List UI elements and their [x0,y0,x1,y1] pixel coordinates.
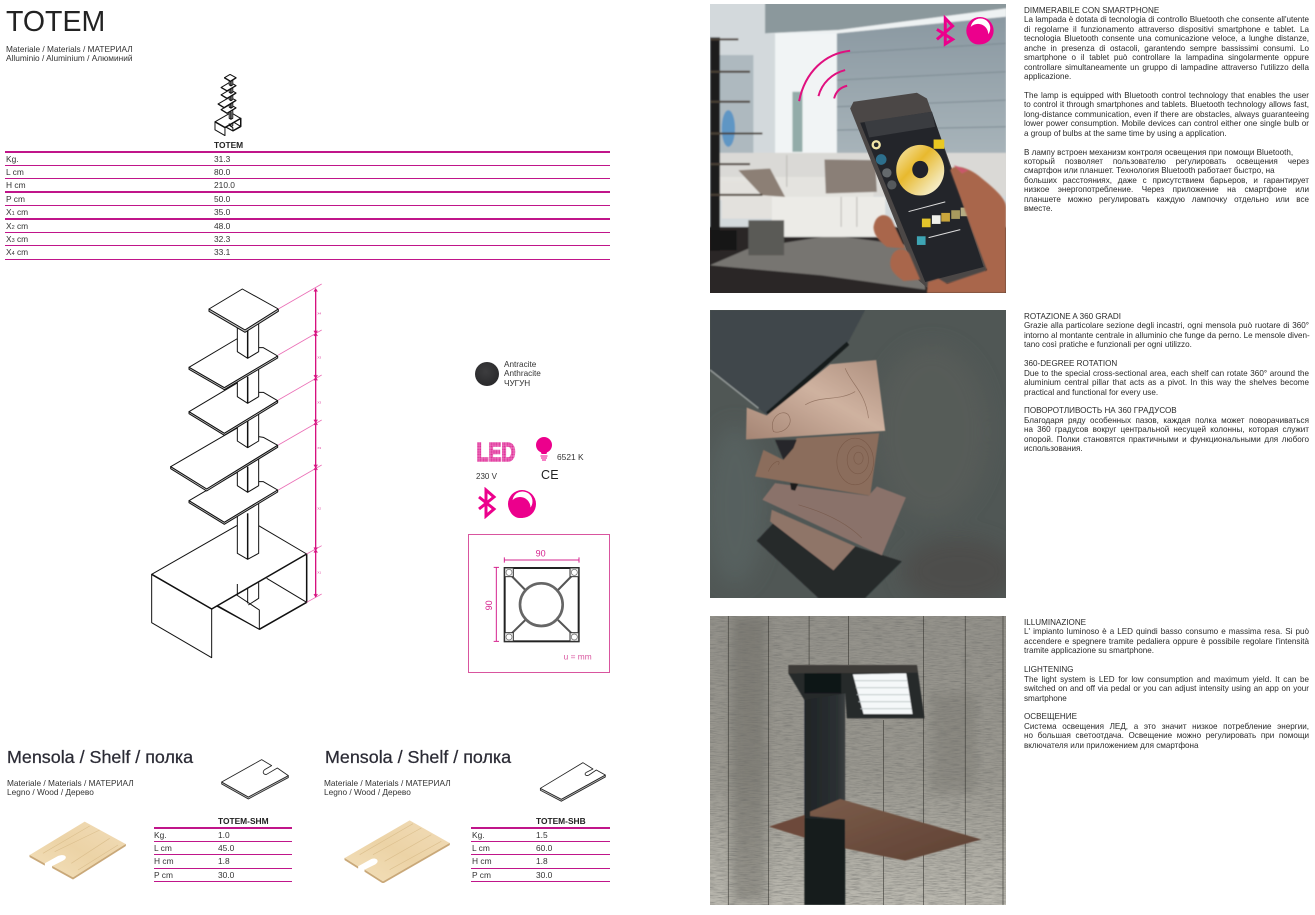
signal arcs [799,51,850,101]
text: dimmable with smartphone: lower power consumption. Mobile devices can control either one single bulb or [1024,119,1309,128]
specification table: 32.3 [214,234,230,244]
table: TOTEM-SHB: P cm [472,870,491,880]
voltage: 230 V [476,472,497,481]
text: 360-degree rotation: Due to the special cross-sectional area, each shelf can rotate 360° around the [1024,369,1309,378]
phone [850,93,987,288]
material text: shelf M: Materiale / Materials / МАТЕРИАЛ [7,778,134,788]
specification table: 35.0 [214,207,230,217]
specification table: L cm [6,167,24,177]
colour swatch: anthracite [475,362,499,386]
photo: smartphone control in living room [710,4,1006,293]
text: lighting: smartphone [1024,694,1067,702]
material text: shelf M: Legno / Wood / Дерево [7,787,94,797]
table: TOTEM-SHM [154,816,292,882]
technical drawing: totem tower with dimensions: X1 [317,571,321,575]
text: dimmable with smartphone: The lamp is equipped with Bluetooth control technology that enables the user [1024,91,1309,100]
table: TOTEM-SHM: 30.0 [218,870,234,880]
specification table: 80.0 [214,167,230,177]
text: lighting: tramite applicazione su smartphone. [1024,646,1154,655]
text: dimmable with smartphone: a group of bulbs at the same time by using a application. [1024,129,1226,138]
image: wood shelf M [29,822,126,880]
text: lighting: The light system is LED for low consumption and maximum yield. It can be [1024,675,1309,684]
text: dimmable with smartphone [1024,6,1309,213]
table: TOTEM-SHB: TOTEM-SHB [536,816,586,826]
material text: shelf M [7,778,134,797]
material text [6,44,133,63]
text: lighting: Система освещения ЛЕД, а это значит низкое потребление энергии, [1024,722,1309,731]
icon: CE mark: CE [541,468,559,482]
bluetooth overlay [937,18,953,44]
technical drawing: totem tower with dimensions: X4 [317,312,321,316]
text: lighting: LIGHTENING [1024,665,1073,674]
text: lighting [1024,618,1309,750]
material text: Alluminio / Aluminium / Алюминий [6,53,132,63]
photo: rotating shelves from above [710,310,1006,598]
specification table: Kg. [6,154,19,164]
specification table: 31.3 [214,154,230,164]
photo: lamp head over concrete wall [710,616,1006,905]
text: 360-degree rotation: ПОВОРОТЛИВОСТЬ НА 360 ГРАДУСОВ [1024,406,1177,415]
heading: shelf M: Mensola / Shelf / полка [7,747,193,767]
technical drawing: totem tower with dimensions [151,284,322,658]
specification table: H cm [6,180,26,190]
specification table [5,140,610,260]
section diagram: 90 x 90 mm profile: 90 [484,600,494,610]
icon: dimmer [508,490,536,518]
text: 360-degree rotation: использования. [1024,444,1083,453]
text: 360-degree rotation: опорой. Полки становятся практичными и функциональными для любого [1024,435,1309,444]
specification table: X4 cm [6,247,28,257]
text: 360-degree rotation: practical and functional for every use. [1024,388,1158,396]
text: dimmable with smartphone: который позволяет пользователю регулировать освещения через [1024,157,1309,166]
section diagram: 90 x 90 mm profile: u = mm [564,652,592,662]
text: dimmable with smartphone: DIMMERABILE CON SMARTPHONE [1024,6,1159,15]
text: dimmable with smartphone: controllare simultaneamente un gruppo di lampadine attraverso l'utilizzo della [1024,63,1309,72]
specification table: P cm [6,194,25,204]
material text: shelf B [324,778,451,797]
table: TOTEM-SHM: 1.8 [218,856,230,866]
dimmer overlay [966,17,994,44]
colour label: Anthracite [504,369,541,378]
table: TOTEM-SHB: L cm [472,843,490,853]
table: TOTEM-SHM: P cm [154,870,173,880]
technical drawing: totem tower with dimensions: X3 [317,446,321,450]
heading: shelf B: Mensola / Shelf / полка [325,747,511,767]
text: dimmable with smartphone: В лампу встроен механизм контроля освещения при помощи Bluetooth, [1024,148,1293,157]
table: TOTEM-SHB: Kg. [472,830,485,840]
text: 360-degree rotation: intorno al montante centrale in alluminio che funge da perno. Le mensole diven- [1024,331,1310,340]
technical drawing: totem tower with dimensions: X3 [317,356,321,360]
text: dimmable with smartphone: вместе. [1024,204,1053,213]
hand [874,165,1006,293]
text: lighting: ILLUMINAZIONE [1024,618,1086,627]
text: dimmable with smartphone: La lampada è dotata di tecnologia di controllo Bluetooth che consente all'utente [1024,15,1309,24]
text: dimmable with smartphone: to control it through smartphones and tablets. Bluetooth technology allows fast, [1024,100,1309,109]
text: 360-degree rotation [1024,312,1310,453]
icon: bluetooth [478,487,496,519]
table: TOTEM-SHB [471,816,610,882]
text: 360-degree rotation: 360-DEGREE ROTATION [1024,359,1117,368]
text: dimmable with smartphone: di regolarne il funzionamento attraverso dispositivi smartphone e tablet. La [1024,25,1309,34]
technical drawing: totem tower with dimensions: X3 [317,401,321,405]
table: TOTEM-SHB: 60.0 [536,843,552,853]
colour label: ЧУГУН [504,379,530,388]
material text: shelf B: Legno / Wood / Дерево [324,787,411,797]
text: 360-degree rotation: Grazie alla particolare sezione degli incastri, ogni mensola può ruotare di 360° [1024,321,1309,330]
table: TOTEM-SHB: 1.5 [536,830,548,840]
table: TOTEM-SHM: H cm [154,856,174,866]
specification table: 33.1 [214,247,230,257]
text: 360-degree rotation: Благодаря ряду особенных пазов, каждая полка может поворачиваться [1024,416,1309,425]
text: dimmable with smartphone: long-distance communication, even if there are obstacles, always guaranteeing [1024,110,1309,119]
section diagram: 90 x 90 mm profile [468,534,610,673]
text: dimmable with smartphone: планшете можно регулировать каждую лампочку отдельно или все [1024,195,1309,204]
material text: shelf B: Materiale / Materials / МАТЕРИАЛ [324,778,451,788]
specification table: X1 cm [6,207,28,217]
text: dimmable with smartphone: tecnologia Bluetooth consente una comunicazione veloce, a lunghe distanze, [1024,34,1309,43]
text: 360-degree rotation: на 360 градусов вокруг центральной несущей колонны, которая служит [1024,425,1309,434]
table: TOTEM-SHM: L cm [154,843,172,853]
technical drawing: totem tower with dimensions: X2 [317,507,321,511]
text: lighting: ОСВЕЩЕНИЕ [1024,712,1077,721]
text: lighting: но большая светоотдача. Освещение можно регулировать при помощи [1024,731,1309,740]
text: dimmable with smartphone: smartphone o il tablet può controllare la lampadina singolarmente oppure [1024,53,1309,62]
text: lighting: включателя или приложением для смартфона [1024,741,1199,750]
specification table: 50.0 [214,194,230,204]
text: lighting: switched on and off via pedal or you can adjust intensity using an app on your [1024,684,1309,693]
icon: shelf M outline [221,759,289,800]
material text: Materiale / Materials / МАТЕРИАЛ [6,44,133,54]
icon: bulb [536,437,552,460]
text: lighting: L' impianto luminoso è a LED quindi basso consumo e massima resa. Si può [1024,627,1309,636]
dimension lines [278,284,322,602]
icon: small totem [214,74,242,136]
text: dimmable with smartphone: anche in presenza di ostacoli, garantendo sempre bassissimi consumi. Lo [1024,44,1309,53]
colour label [504,360,541,388]
table: TOTEM-SHB: 1.8 [536,856,548,866]
text: dimmable with smartphone: низкое энергопотребление. Через приложение на смартфоне или [1024,185,1309,194]
table: TOTEM-SHM: 45.0 [218,843,234,853]
text: lighting: accendere e spegnere tramite pedaliera oppure è possibile regolare l'intensità [1024,637,1309,646]
colour label: Antracite [504,360,536,369]
table: TOTEM-SHM: TOTEM-SHM [218,816,269,826]
image: wood shelf B [344,820,450,883]
specification table: TOTEM [214,140,243,150]
table: TOTEM-SHB: 30.0 [536,870,552,880]
specification table: X2 cm [6,221,28,231]
text: 360-degree rotation: tano così pratiche e funzionali per ogni utilizzo. [1024,340,1192,349]
specification table: 48.0 [214,221,230,231]
icon: shelf B outline [540,762,606,802]
title: TOTEM [6,6,105,38]
table: TOTEM-SHB: H cm [472,856,492,866]
section diagram: 90 x 90 mm profile: 90 [536,549,546,559]
colour temperature: 6521 K [557,452,584,462]
text: 360-degree rotation: ROTAZIONE A 360 GRADI [1024,312,1121,321]
specification table: 210.0 [214,180,235,190]
text: dimmable with smartphone: applicazione. [1024,72,1071,81]
text: 360-degree rotation: aluminium central pillar that acts as a pivot. In this way the shelves become [1024,378,1309,387]
text: dimmable with smartphone: смартфон или планшет. Технология Bluetooth работает быстро, на [1024,166,1275,175]
table: TOTEM-SHM: 1.0 [218,830,230,840]
specification table: X3 cm [6,234,28,244]
text: dimmable with smartphone: больших расстояниях, даже с присутствием барьеров, и гарантирует [1024,176,1309,185]
table: TOTEM-SHM: Kg. [154,830,167,840]
